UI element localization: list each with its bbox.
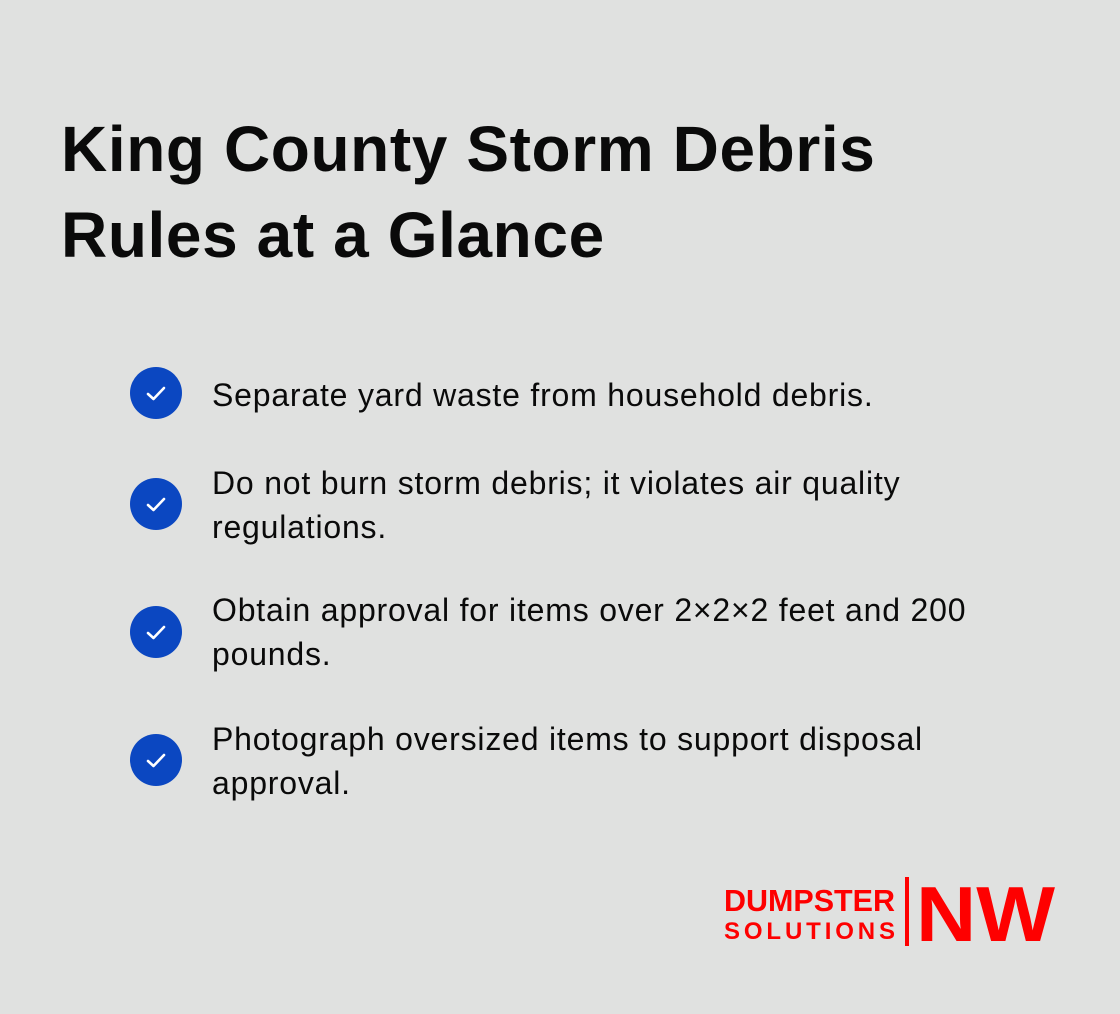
text: Photograph oversized items to support disposal approval. bbox=[212, 721, 923, 801]
item 4 bbox=[130, 721, 923, 801]
title bbox=[61, 113, 875, 271]
item 1 bbox=[130, 367, 874, 419]
icon: check bbox=[130, 734, 182, 786]
logo bbox=[724, 875, 1055, 949]
item 3 bbox=[130, 592, 966, 672]
icon: check bbox=[130, 367, 182, 419]
item 2 bbox=[130, 465, 900, 545]
logo: DUMPSTER bbox=[724, 883, 895, 918]
icon: check bbox=[130, 478, 182, 530]
title: King County Storm Debris bbox=[61, 113, 875, 185]
text: Do not burn storm debris; it violates air quality regulations. bbox=[212, 465, 900, 545]
text: Separate yard waste from household debris. bbox=[212, 377, 874, 413]
title: Rules at a Glance bbox=[61, 199, 605, 271]
logo: SOLUTIONS bbox=[724, 918, 895, 945]
text: Obtain approval for items over 2×2×2 feet and 200 pounds. bbox=[212, 592, 966, 672]
icon: check bbox=[130, 606, 182, 658]
